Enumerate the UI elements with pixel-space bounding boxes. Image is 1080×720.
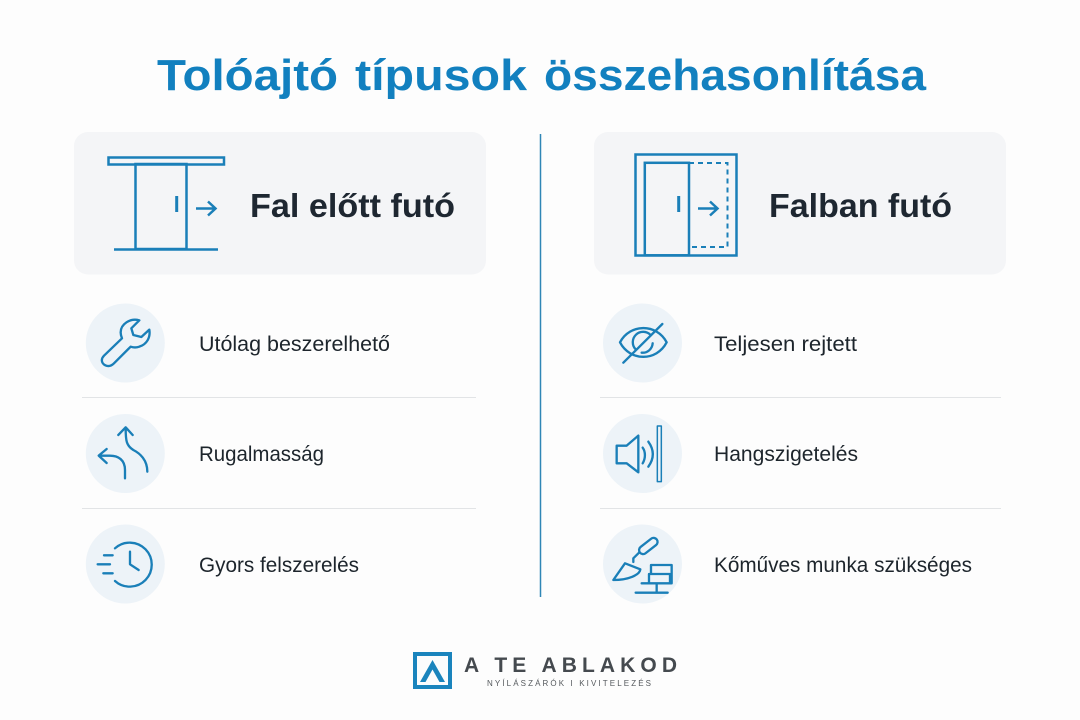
title <box>157 51 927 100</box>
panel: falban futó <box>594 132 1006 274</box>
title: összehasonlítása <box>544 51 927 100</box>
label: Rugalmasság <box>199 443 324 466</box>
icon: speaker and wall <box>617 426 661 482</box>
item: teljesen rejtett <box>603 304 857 382</box>
label: Kőműves munka szükséges <box>714 554 972 577</box>
label: Hangszigetelés <box>714 443 858 466</box>
row dividers <box>82 398 1001 508</box>
icon: trowel and bricks <box>613 536 672 593</box>
icon: branching arrows <box>99 427 147 478</box>
logo wordmark: A TE ABLAKOD <box>464 654 677 677</box>
item: hangszigetelés <box>603 414 858 493</box>
icon: surface-mounted sliding door <box>108 158 224 250</box>
icon: fast clock <box>98 543 152 587</box>
panel: fal előtt futó <box>74 132 486 274</box>
item: utólag beszerelhető <box>86 304 390 382</box>
label: Gyors felszerelés <box>199 554 359 577</box>
item: gyors felszerelés <box>86 524 359 604</box>
icon: crossed-out eye <box>620 324 667 363</box>
title: Tolóajtó <box>157 51 338 100</box>
item: kőműves munka szükséges <box>603 524 972 604</box>
logo tagline: NYÍLÁSZÁRÓK I KIVITELEZÉS <box>487 679 651 688</box>
heading: falban futó: Falban futó <box>769 187 952 224</box>
center divider <box>540 134 542 597</box>
heading: fal előtt futó: Fal előtt futó <box>250 187 455 224</box>
icon: wrench <box>102 320 150 366</box>
title: típusok <box>355 51 528 100</box>
label: Utólag beszerelhető <box>199 333 390 356</box>
logo mark <box>415 654 450 687</box>
item: rugalmasság <box>86 414 324 493</box>
label: Teljesen rejtett <box>714 333 857 356</box>
logo: A Te Ablakod <box>415 654 677 688</box>
icon: pocket sliding door <box>636 154 736 256</box>
